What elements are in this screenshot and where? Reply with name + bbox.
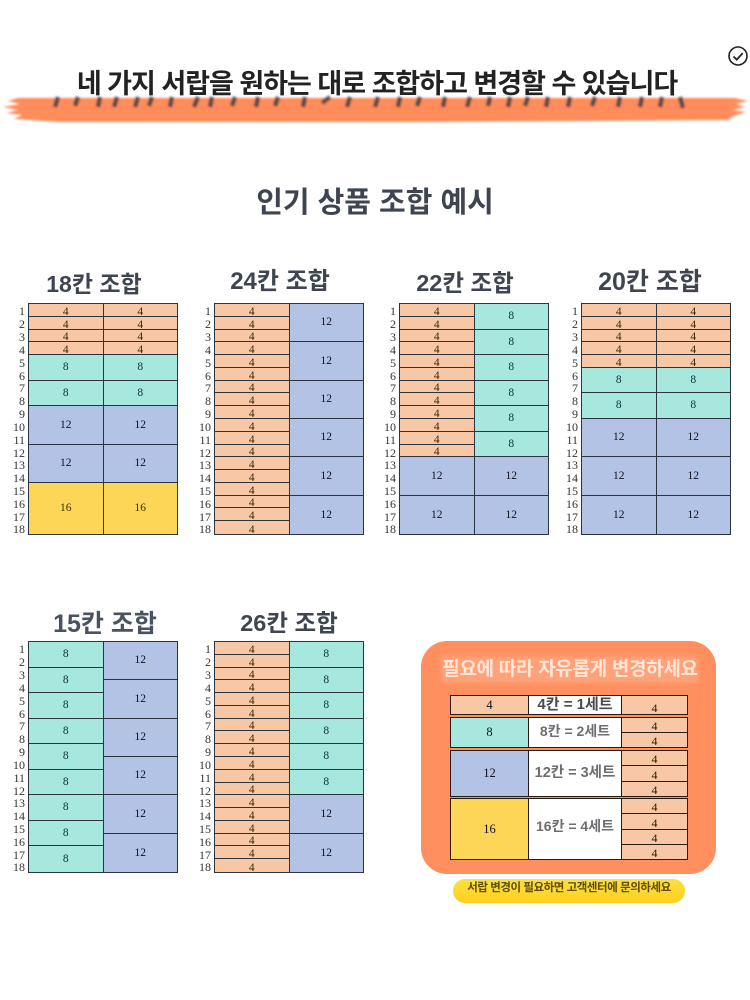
row numbers: 22칸: 15 [384, 484, 396, 498]
table: 26칸: 12 [320, 808, 332, 820]
row numbers: 26칸: 3 [205, 668, 211, 682]
row numbers: 24칸: 10 [199, 420, 211, 434]
row numbers: 22칸: 2 [390, 317, 396, 331]
row: 12칸 = 3세트: 4 [652, 768, 658, 782]
heading: 18칸 조합: 18칸 조합 [46, 271, 142, 297]
row numbers: 20칸: 9 [572, 407, 578, 421]
row numbers: 24칸: 7 [205, 381, 211, 395]
icon: check circle [728, 46, 748, 66]
table: 18칸: 16 [134, 502, 146, 514]
table: 22칸: 4 [434, 306, 440, 318]
table: 26칸: 4 [249, 720, 255, 732]
table: 18칸: 12 [60, 419, 72, 431]
panel heading: 필요에 따라 자유롭게 변경하세요 [442, 659, 698, 680]
table: 24칸: 4 [249, 510, 255, 522]
row numbers: 18칸: 18 [13, 522, 25, 536]
table: 20칸 [581, 303, 731, 535]
row numbers: 24칸: 13 [199, 458, 211, 472]
table: 18칸: 4 [63, 319, 69, 331]
table: 22칸: 8 [508, 361, 514, 373]
table: 24칸: 12 [320, 393, 332, 405]
table: 22칸: 8 [508, 387, 514, 399]
row numbers: 22칸: 11 [384, 433, 396, 447]
table: 24칸: 4 [249, 306, 255, 318]
row: 12칸 = 3세트: 12칸 = 3세트 [535, 765, 615, 781]
table: 24칸: 12 [320, 316, 332, 328]
row numbers: 24칸: 11 [199, 433, 211, 447]
row numbers: 20칸: 17 [566, 510, 578, 524]
table: 18칸: 12 [60, 457, 72, 469]
row numbers: 15칸: 11 [13, 771, 25, 785]
table: 26칸: 4 [249, 862, 255, 874]
row numbers: 15칸: 7 [19, 719, 25, 733]
table: 15칸: 12 [134, 693, 146, 705]
row numbers: 15칸: 9 [19, 745, 25, 759]
row: 8칸 = 2세트: 4 [652, 734, 658, 748]
table: 22칸: 4 [434, 382, 440, 394]
table: 24칸: 12 [320, 431, 332, 443]
table: 18칸: 4 [63, 331, 69, 343]
row numbers: 18칸: 10 [13, 420, 25, 434]
row numbers: 18칸: 7 [19, 381, 25, 395]
table: 15칸 [28, 641, 178, 873]
row numbers: 22칸: 5 [390, 356, 396, 370]
row numbers: 24칸: 16 [199, 497, 211, 511]
table: 20칸: 4 [690, 331, 696, 343]
table: 22칸: 4 [434, 370, 440, 382]
table: 22칸: 4 [434, 331, 440, 343]
row: 16칸 = 4세트 [450, 798, 688, 860]
row numbers: 18칸: 13 [13, 458, 25, 472]
table: 22칸: 4 [434, 319, 440, 331]
row numbers: 26칸: 7 [205, 719, 211, 733]
table: 26칸: 4 [249, 669, 255, 681]
row numbers: 20칸: 12 [566, 446, 578, 460]
row numbers: 24칸: 17 [199, 510, 211, 524]
table: 24칸: 4 [249, 370, 255, 382]
table: 26칸: 4 [249, 823, 255, 835]
title: 네 가지 서랍을 원하는 대로 조합하고 변경할 수 있습니다 [77, 69, 677, 99]
row numbers: 26칸: 13 [199, 796, 211, 810]
row numbers: 24칸: 5 [205, 356, 211, 370]
table: 26칸: 4 [249, 810, 255, 822]
row numbers: 15칸: 2 [19, 655, 25, 669]
row numbers: 20칸: 2 [572, 317, 578, 331]
table: 24칸: 12 [320, 509, 332, 521]
table: 26칸: 4 [249, 708, 255, 720]
row numbers: 26칸: 11 [199, 771, 211, 785]
table: 15칸: 8 [63, 725, 69, 737]
row: 4칸 = 1세트: 4칸 = 1세트 [537, 696, 613, 712]
table: 20칸: 8 [690, 399, 696, 411]
row: 8칸 = 2세트 [450, 717, 688, 748]
row numbers: 20칸: 1 [572, 304, 578, 318]
table: 24칸: 4 [249, 485, 255, 497]
row numbers: 22칸: 3 [390, 330, 396, 344]
row numbers: 24칸: 9 [205, 407, 211, 421]
table: 18칸: 12 [134, 457, 146, 469]
row numbers: 22칸: 7 [390, 381, 396, 395]
panel heading haze [441, 656, 698, 683]
row numbers: 20칸: 14 [566, 471, 578, 485]
table: 18칸: 4 [63, 344, 69, 356]
table: 20칸: 8 [616, 399, 622, 411]
table: 24칸: 4 [249, 319, 255, 331]
table: 22칸: 12 [506, 509, 517, 521]
table: 20칸: 4 [690, 357, 696, 369]
table: 18칸: 4 [137, 331, 143, 343]
row numbers: 18칸: 14 [13, 471, 25, 485]
table: 26칸: 4 [249, 644, 255, 656]
table: 15칸: 8 [63, 750, 69, 762]
heading: 15칸 조합: 15칸 조합 [53, 610, 157, 638]
row: 16칸 = 4세트: 4 [652, 846, 658, 860]
table: 15칸: 8 [63, 827, 69, 839]
table: 15칸: 8 [63, 853, 69, 865]
row numbers: 20칸: 3 [572, 330, 578, 344]
row numbers: 18칸: 16 [13, 497, 25, 511]
table: 24칸: 4 [249, 344, 255, 356]
row numbers: 18칸: 12 [13, 446, 25, 460]
table: 15칸: 8 [63, 648, 69, 660]
row: 8칸 = 2세트: 8 [486, 725, 493, 739]
row numbers: 26칸: 9 [205, 745, 211, 759]
table: 15칸: 8 [63, 776, 69, 788]
table: 26칸: 4 [249, 797, 255, 809]
table: 18칸 [28, 303, 178, 535]
table: 26칸: 4 [249, 772, 255, 784]
table: 24칸: 12 [320, 355, 332, 367]
heading: 24칸 조합: 24칸 조합 [230, 268, 330, 295]
row numbers: 22칸: 17 [384, 510, 396, 524]
row numbers: 15칸: 16 [13, 835, 25, 849]
table: 18칸: 8 [63, 361, 69, 373]
row numbers: 20칸: 13 [566, 458, 578, 472]
row numbers: 26칸: 8 [205, 732, 211, 746]
table: 26칸: 4 [249, 657, 255, 669]
table: 24칸: 4 [249, 382, 255, 394]
row numbers: 18칸 [13, 304, 25, 536]
table: 26칸: 8 [323, 648, 329, 660]
table: 18칸: 8 [63, 387, 69, 399]
table: 22칸: 4 [434, 395, 440, 407]
row numbers: 20칸: 16 [566, 497, 578, 511]
table: 26칸: 8 [323, 699, 329, 711]
row: 12칸 = 3세트 [450, 750, 688, 797]
table: 18칸: 4 [137, 319, 143, 331]
row numbers: 18칸: 15 [13, 484, 25, 498]
table: 22칸: 4 [434, 357, 440, 369]
row numbers: 20칸: 7 [572, 381, 578, 395]
row numbers: 15칸 [13, 642, 25, 874]
row numbers: 20칸: 11 [566, 433, 578, 447]
panel: free change guide [421, 641, 716, 874]
row numbers: 18칸: 3 [19, 330, 25, 344]
heading: 22칸 조합: 22칸 조합 [416, 270, 514, 296]
row numbers: 18칸: 9 [19, 407, 25, 421]
table: 22칸 [399, 303, 549, 535]
table: 15칸: 12 [134, 731, 146, 743]
table: 22칸: 8 [508, 336, 514, 348]
table: 15칸: 12 [134, 808, 146, 820]
row: 16칸 = 4세트: 16 [483, 822, 496, 836]
table: 20칸: 12 [688, 509, 699, 521]
row numbers: 15칸: 3 [19, 668, 25, 682]
table: 20칸: 4 [690, 306, 696, 318]
row numbers: 26칸: 17 [199, 848, 211, 862]
table: 26칸: 4 [249, 695, 255, 707]
row numbers: 15칸: 6 [19, 707, 25, 721]
row: 8칸 = 2세트: 4 [652, 719, 658, 733]
callout pill: 서랍 변경이 필요하면 고객센터에 문의하세요 [467, 882, 671, 894]
row: 12칸 = 3세트: 4 [652, 752, 658, 766]
table: 18칸: 4 [137, 344, 143, 356]
table: 24칸: 4 [249, 446, 255, 458]
row numbers: 15칸: 15 [13, 822, 25, 836]
row: 4칸 = 1세트: 4 [486, 698, 493, 712]
row numbers: 26칸: 15 [199, 822, 211, 836]
table: 24칸: 4 [249, 395, 255, 407]
table: 20칸: 12 [688, 470, 699, 482]
heading: 20칸 조합: 20칸 조합 [598, 268, 702, 296]
row: 8칸 = 2세트: 8칸 = 2세트 [540, 722, 610, 738]
table: 15칸: 8 [63, 699, 69, 711]
row numbers: 18칸: 11 [13, 433, 25, 447]
table: 26칸: 8 [323, 776, 329, 788]
row numbers: 22칸: 4 [390, 343, 396, 357]
row numbers: 20칸: 18 [566, 522, 578, 536]
row numbers: 22칸: 8 [390, 394, 396, 408]
table: 20칸: 4 [616, 319, 622, 331]
row numbers: 22칸: 14 [384, 471, 396, 485]
row numbers: 18칸: 17 [13, 510, 25, 524]
table: 26칸: 8 [323, 750, 329, 762]
table: 20칸: 12 [613, 431, 624, 443]
table: 26칸: 4 [249, 835, 255, 847]
table: 18칸: 12 [134, 419, 146, 431]
table: 26칸 [214, 641, 364, 873]
row: 4칸 = 1세트 [450, 695, 688, 715]
row numbers: 22칸: 9 [390, 407, 396, 421]
row numbers: 15칸: 1 [19, 642, 25, 656]
row numbers: 26칸: 18 [199, 860, 211, 874]
table: 15칸: 12 [134, 847, 146, 859]
table: 24칸: 4 [249, 524, 255, 536]
row numbers: 22칸: 1 [390, 304, 396, 318]
table: 20칸: 12 [688, 431, 699, 443]
row numbers: 20칸 [566, 304, 578, 536]
table: 20칸: 12 [613, 470, 624, 482]
table: 20칸: 8 [690, 374, 696, 386]
callout pill [453, 879, 685, 903]
table: 22칸: 4 [434, 344, 440, 356]
row numbers: 26칸: 12 [199, 784, 211, 798]
row numbers: 24칸: 6 [205, 369, 211, 383]
table: 26칸: 4 [249, 682, 255, 694]
row numbers: 26칸: 16 [199, 835, 211, 849]
row: 16칸 = 4세트: 16칸 = 4세트 [536, 818, 614, 834]
row numbers: 15칸: 13 [13, 796, 25, 810]
row: 16칸 = 4세트: 4 [652, 800, 658, 814]
table: 22칸: 4 [434, 421, 440, 433]
row numbers: 24칸: 12 [199, 446, 211, 460]
table: 26칸: 8 [323, 674, 329, 686]
table: 18칸: 16 [60, 502, 72, 514]
row numbers: 24칸: 4 [205, 343, 211, 357]
table: 26칸: 4 [249, 746, 255, 758]
table: 24칸: 4 [249, 408, 255, 420]
row: 16칸 = 4세트: 4 [652, 831, 658, 845]
table: 20칸: 4 [616, 331, 622, 343]
table: 24칸: 4 [249, 331, 255, 343]
row numbers: 22칸: 13 [384, 458, 396, 472]
row numbers: 26칸: 2 [205, 655, 211, 669]
table: 18칸: 4 [63, 306, 69, 318]
row numbers: 18칸: 8 [19, 394, 25, 408]
table: 24칸: 4 [249, 472, 255, 484]
table: 24칸: 4 [249, 434, 255, 446]
table: 20칸: 4 [690, 344, 696, 356]
row numbers: 15칸: 18 [13, 860, 25, 874]
table: 15칸: 12 [134, 654, 146, 666]
table: 22칸: 12 [431, 509, 442, 521]
row numbers: 20칸: 4 [572, 343, 578, 357]
table: 20칸: 4 [616, 357, 622, 369]
table: 15칸: 8 [63, 674, 69, 686]
table: 24칸: 4 [249, 357, 255, 369]
row numbers: 26칸: 4 [205, 681, 211, 695]
row numbers: 24칸: 2 [205, 317, 211, 331]
row numbers: 18칸: 6 [19, 369, 25, 383]
row numbers: 22칸: 6 [390, 369, 396, 383]
row: 12칸 = 3세트: 12 [483, 766, 496, 780]
table: 20칸: 8 [616, 374, 622, 386]
section heading: 인기 상품 조합 예시 [256, 187, 494, 219]
row numbers: 26칸: 1 [205, 642, 211, 656]
row numbers: 22칸: 10 [384, 420, 396, 434]
table: 20칸: 4 [690, 319, 696, 331]
table: 26칸: 4 [249, 759, 255, 771]
table: 26칸: 4 [249, 848, 255, 860]
table: 22칸: 4 [434, 434, 440, 446]
row numbers: 15칸: 17 [13, 848, 25, 862]
table: 22칸: 8 [508, 438, 514, 450]
row numbers: 22칸: 16 [384, 497, 396, 511]
row numbers: 22칸 [384, 304, 396, 536]
table: 18칸: 8 [137, 387, 143, 399]
row numbers: 20칸: 5 [572, 356, 578, 370]
row numbers: 15칸: 14 [13, 809, 25, 823]
row numbers: 24칸 [199, 304, 211, 536]
heading: 26칸 조합: 26칸 조합 [240, 610, 338, 636]
row numbers: 24칸: 14 [199, 471, 211, 485]
table: 20칸: 12 [613, 509, 624, 521]
table: 20칸: 4 [616, 344, 622, 356]
table: 18칸: 4 [137, 306, 143, 318]
table: 26칸: 8 [323, 725, 329, 737]
row numbers: 15칸: 4 [19, 681, 25, 695]
row numbers: 15칸: 10 [13, 758, 25, 772]
table: 15칸: 8 [63, 801, 69, 813]
row numbers: 20칸: 10 [566, 420, 578, 434]
row: 12칸 = 3세트: 4 [652, 783, 658, 797]
row numbers: 24칸: 3 [205, 330, 211, 344]
row numbers: 15칸: 5 [19, 694, 25, 708]
row numbers: 26칸: 10 [199, 758, 211, 772]
table: 22칸: 4 [434, 408, 440, 420]
row numbers: 26칸: 14 [199, 809, 211, 823]
row: 16칸 = 4세트: 4 [652, 816, 658, 830]
table: 22칸: 12 [506, 470, 517, 482]
row numbers: 18칸: 4 [19, 343, 25, 357]
row numbers: 18칸: 2 [19, 317, 25, 331]
table: 20칸: 4 [616, 306, 622, 318]
table: 18칸: 8 [137, 361, 143, 373]
table: 22칸: 8 [508, 310, 514, 322]
row numbers: 26칸: 6 [205, 707, 211, 721]
table: 26칸: 4 [249, 733, 255, 745]
row numbers: 20칸: 15 [566, 484, 578, 498]
table: 22칸: 12 [431, 470, 442, 482]
table: 24칸: 12 [320, 470, 332, 482]
table: 22칸: 4 [434, 446, 440, 458]
row numbers: 22칸: 18 [384, 522, 396, 536]
row numbers: 26칸 [199, 642, 211, 874]
row numbers: 18칸: 1 [19, 304, 25, 318]
row numbers: 24칸: 8 [205, 394, 211, 408]
table: 24칸: 4 [249, 459, 255, 471]
table: 24칸: 4 [249, 421, 255, 433]
table: 26칸: 4 [249, 784, 255, 796]
row numbers: 22칸: 12 [384, 446, 396, 460]
brush stroke banner [3, 94, 748, 124]
table: 15칸: 12 [134, 769, 146, 781]
table: 24칸: 4 [249, 497, 255, 509]
row numbers: 24칸: 15 [199, 484, 211, 498]
table: 24칸 [214, 303, 364, 535]
row numbers: 24칸: 1 [205, 304, 211, 318]
row: 4칸 = 1세트: 4 [652, 701, 658, 715]
row numbers: 15칸: 12 [13, 784, 25, 798]
table: 22칸: 8 [508, 412, 514, 424]
row numbers: 24칸: 18 [199, 522, 211, 536]
row numbers: 26칸: 5 [205, 694, 211, 708]
table: 26칸: 12 [320, 847, 332, 859]
row numbers: 18칸: 5 [19, 356, 25, 370]
row numbers: 20칸: 8 [572, 394, 578, 408]
row numbers: 20칸: 6 [572, 369, 578, 383]
row numbers: 15칸: 8 [19, 732, 25, 746]
